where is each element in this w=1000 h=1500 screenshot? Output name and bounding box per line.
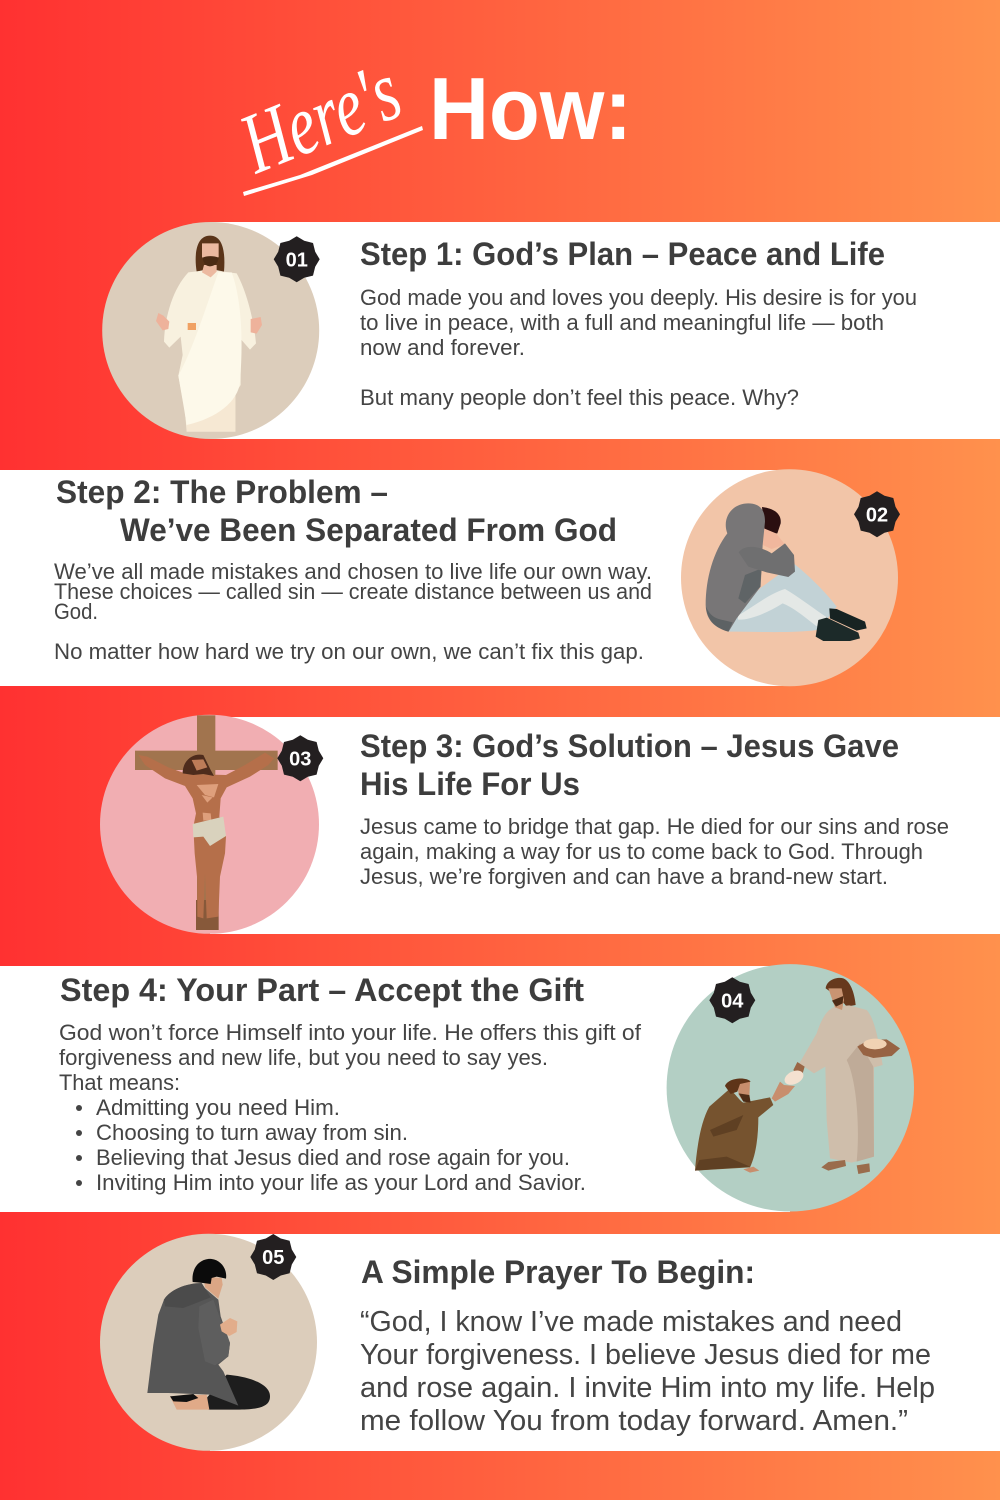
circle <box>667 964 914 1212</box>
badge 02 <box>854 491 900 537</box>
main word: How: <box>429 59 632 158</box>
body text: God made you and loves you deeply. His desire is for you <box>360 285 917 310</box>
body text: That means: <box>59 1070 180 1095</box>
body text: Jesus, we’re forgiven and can have a brand-new start. <box>360 864 888 889</box>
body text: But many people don’t feel this peace. Why? <box>360 385 799 410</box>
panel strip <box>210 1234 1000 1451</box>
illustration: Jesus standing <box>156 236 262 432</box>
body text <box>360 814 949 889</box>
badge 04 <box>709 977 755 1023</box>
heading: Step 4: Your Part – Accept the Gift <box>60 972 584 1008</box>
heading: Step 1: God’s Plan – Peace and Life <box>360 236 885 272</box>
illustration: person sitting with head in hands <box>706 503 867 641</box>
handwritten word: Here's <box>226 42 413 192</box>
badge 02: 02 <box>866 504 888 526</box>
bullet list <box>76 1095 586 1195</box>
badge 01 <box>274 236 320 282</box>
panel: prayer <box>100 1234 1000 1451</box>
prayer text: me follow You from today forward. Amen.” <box>360 1405 908 1437</box>
body text: No matter how hard we try on our own, we can’t fix this gap. <box>54 639 644 664</box>
heading <box>56 474 617 548</box>
panel: step 4 <box>0 964 914 1212</box>
heading: Step 2: The Problem – <box>56 474 388 510</box>
bullet list: Admitting you need Him. <box>96 1095 340 1120</box>
prayer text: and rose again. I invite Him into my life. Help <box>360 1372 935 1404</box>
panel strip <box>0 470 790 686</box>
body text: God won’t force Himself into your life. He offers this gift of <box>59 1020 642 1045</box>
panel: step 1 <box>102 222 1000 439</box>
body text <box>54 559 652 664</box>
panel strip <box>0 966 790 1212</box>
underline stroke <box>243 126 423 196</box>
body text: Jesus came to bridge that gap. He died for our sins and rose <box>360 814 949 839</box>
prayer text: “God, I know I’ve made mistakes and need <box>360 1306 902 1338</box>
illustration: crucifixion <box>135 715 278 930</box>
title <box>226 42 632 196</box>
badge 04: 04 <box>721 990 744 1012</box>
panel: step 3 <box>100 715 1000 934</box>
circle <box>681 469 898 686</box>
body text: We’ve all made mistakes and chosen to live life our own way. <box>54 559 652 584</box>
bullet list: Inviting Him into your life as your Lord and Savior. <box>96 1170 586 1195</box>
badge 03 <box>277 735 323 781</box>
body text <box>360 285 917 410</box>
circle <box>100 1234 317 1451</box>
heading: We’ve Been Separated From God <box>120 512 617 548</box>
badge 05: 05 <box>262 1247 284 1269</box>
body text: now and forever. <box>360 335 525 360</box>
body text: to live in peace, with a full and meaningful life — both <box>360 310 884 335</box>
badge 03: 03 <box>289 748 311 770</box>
body text: forgiveness and new life, but you need to say yes. <box>59 1045 548 1070</box>
circle <box>102 222 319 439</box>
body text: again, making a way for us to come back to God. Through <box>360 839 923 864</box>
illustration: Jesus offering bread <box>695 978 900 1174</box>
heading: A Simple Prayer To Begin: <box>361 1254 755 1290</box>
body text: These choices — called sin — create distance between us and <box>54 579 652 604</box>
body text: God. <box>54 599 98 624</box>
bullet list: Choosing to turn away from sin. <box>96 1120 408 1145</box>
heading <box>360 728 899 802</box>
prayer text: Your forgiveness. I believe Jesus died for me <box>360 1339 931 1371</box>
panel strip <box>210 222 1000 439</box>
badge 01: 01 <box>286 249 308 271</box>
badge 05 <box>250 1234 296 1280</box>
bullet list: Believing that Jesus died and rose again for you. <box>96 1145 570 1170</box>
panel strip <box>210 717 1000 934</box>
circle <box>100 715 319 934</box>
heading: Step 3: God’s Solution – Jesus Gave <box>360 728 899 764</box>
body text <box>59 1020 642 1095</box>
heading: His Life For Us <box>360 766 580 802</box>
prayer text <box>360 1306 935 1437</box>
illustration: person kneeling in prayer <box>147 1259 270 1410</box>
panel: step 2 <box>0 469 900 686</box>
